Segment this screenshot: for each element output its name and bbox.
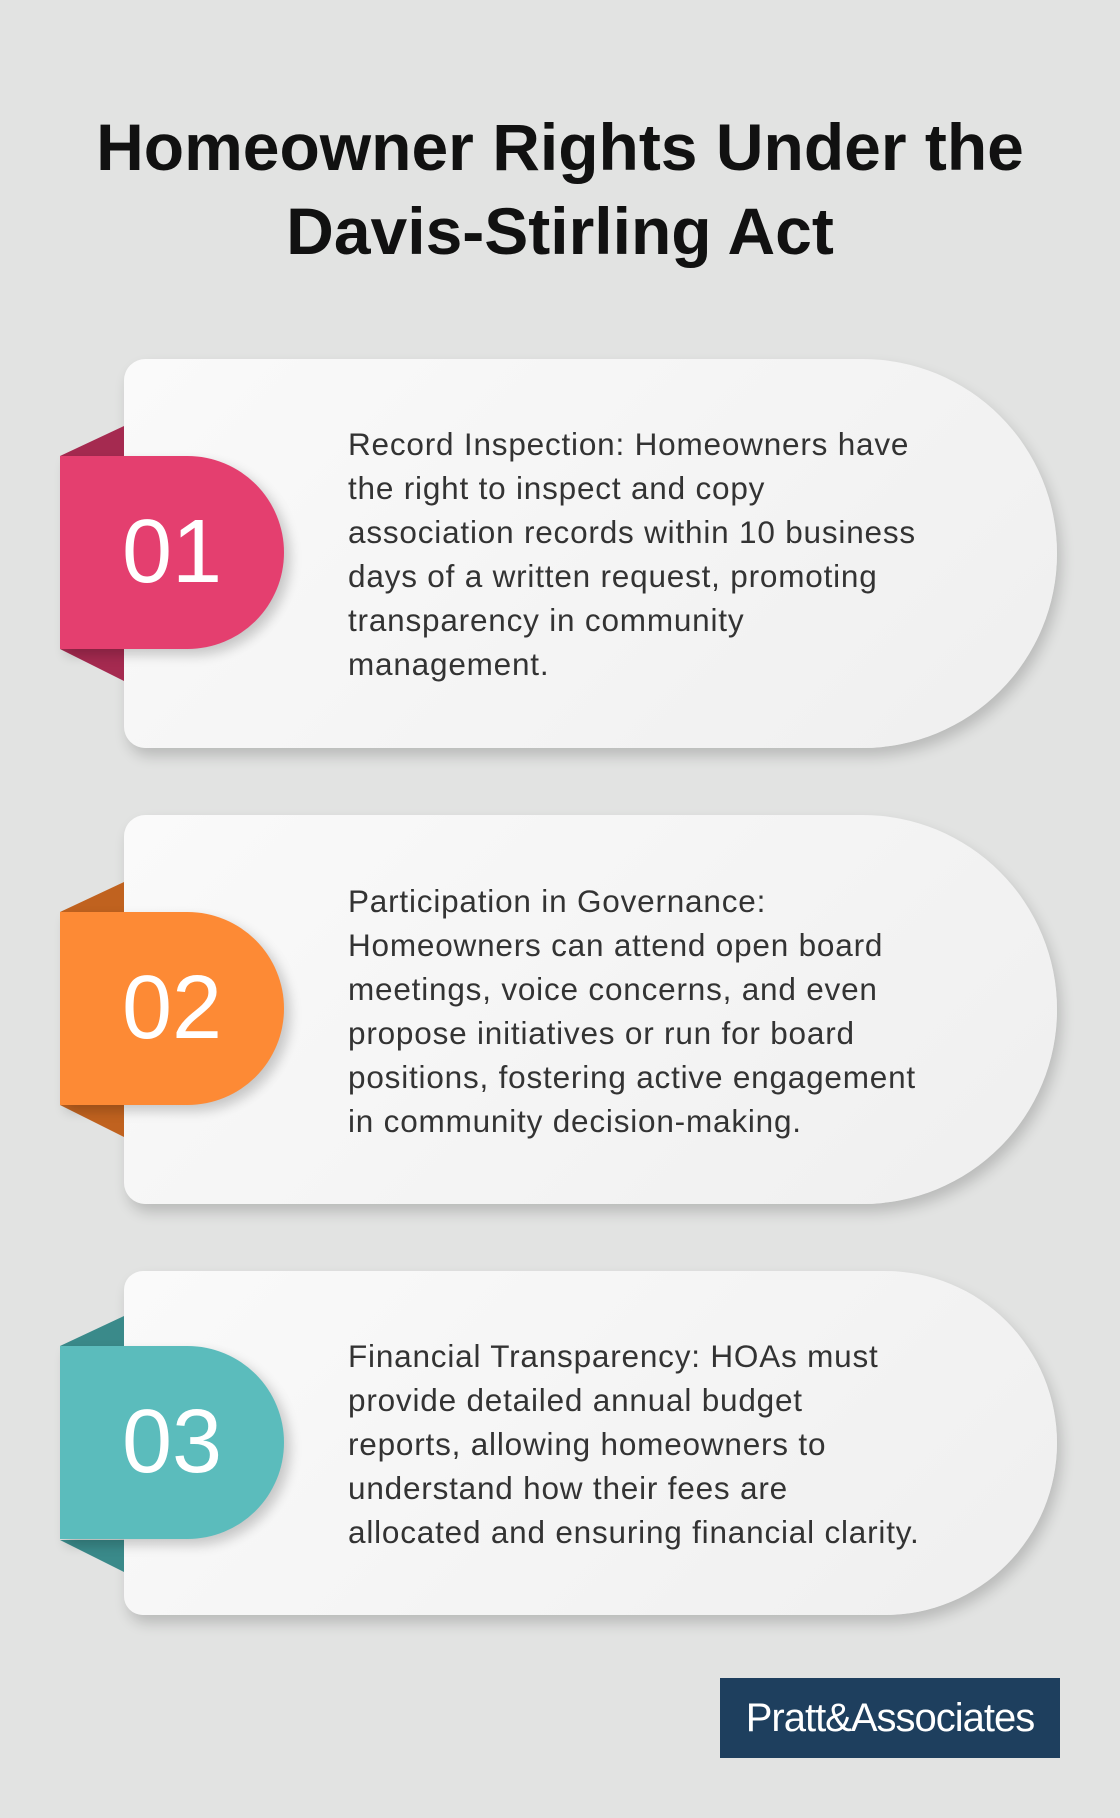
fold bottom 02	[60, 1105, 124, 1137]
text 03	[348, 1338, 920, 1550]
text 02	[348, 883, 916, 1139]
card 03	[124, 1271, 1057, 1615]
text 01: association records within 10 business	[348, 514, 916, 550]
text 02: propose initiatives or run for board	[348, 1015, 855, 1051]
fold top 02	[60, 882, 124, 912]
text 01: management.	[348, 646, 549, 682]
title: Homeowner Rights Under the	[96, 110, 1024, 184]
text 02: Participation in Governance:	[348, 883, 766, 919]
panel: item 01	[60, 359, 1066, 762]
text 01	[348, 426, 916, 682]
badge 02	[60, 912, 284, 1105]
title	[96, 110, 1024, 268]
text 01: days of a written request, promoting	[348, 558, 878, 594]
text 02: Homeowners can attend open board	[348, 927, 883, 963]
badge 03	[60, 1346, 284, 1539]
fold top 01	[60, 426, 124, 456]
badge 01: 01	[122, 502, 222, 602]
text 03: Financial Transparency: HOAs must	[348, 1338, 879, 1374]
badge 02: 02	[122, 958, 222, 1058]
text 01: Record Inspection: Homeowners have	[348, 426, 909, 462]
text 01: transparency in community	[348, 602, 744, 638]
text 01: the right to inspect and copy	[348, 470, 765, 506]
text 03: reports, allowing homeowners to	[348, 1426, 826, 1462]
fold bottom 03	[60, 1540, 124, 1572]
text 02: in community decision-making.	[348, 1103, 802, 1139]
fold bottom 01	[60, 649, 124, 681]
logo	[720, 1678, 1060, 1758]
logo: Pratt&Associates	[746, 1696, 1034, 1740]
card 02	[124, 815, 1057, 1204]
text 03: understand how their fees are	[348, 1470, 788, 1506]
panel: item 02	[60, 815, 1066, 1218]
text 02: meetings, voice concerns, and even	[348, 971, 878, 1007]
fold top 03	[60, 1316, 124, 1346]
badge 03: 03	[122, 1392, 222, 1492]
badge 01	[60, 456, 284, 649]
title: Davis-Stirling Act	[286, 194, 834, 268]
text 03: allocated and ensuring financial clarity.	[348, 1514, 920, 1550]
text 03: provide detailed annual budget	[348, 1382, 803, 1418]
card 01	[124, 359, 1057, 748]
text 02: positions, fostering active engagement	[348, 1059, 916, 1095]
